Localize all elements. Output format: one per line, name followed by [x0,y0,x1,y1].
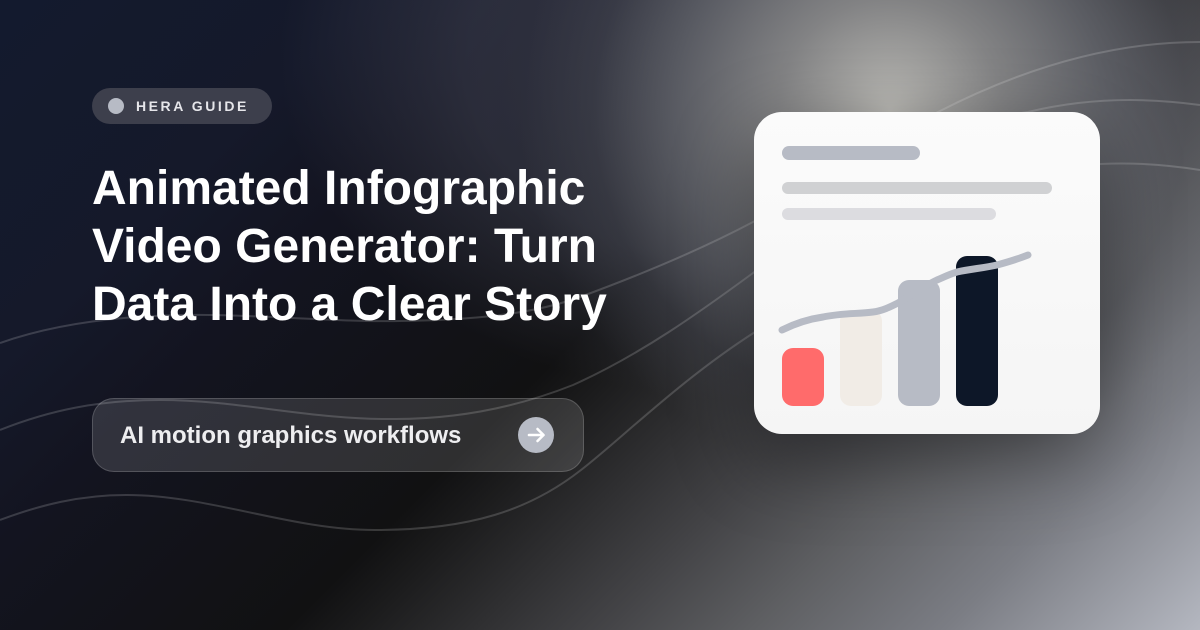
bar chart with trend line [778,252,1032,406]
title: Animated Infographic [92,162,585,215]
badge dot [108,98,124,114]
badge: HERA GUIDE [92,88,272,124]
placeholder text line 1 [782,182,1052,194]
panel: chart card [754,112,1100,434]
pill label: AI motion graphics workflows [120,422,461,449]
title: Video Generator: Turn [92,220,597,273]
call to action pill [92,398,584,472]
placeholder heading line [782,146,920,160]
title: Data Into a Clear Story [92,278,607,331]
icon: arrow in circle [518,417,554,453]
placeholder text line 2 [782,208,996,220]
badge label: HERA GUIDE [136,98,249,114]
title [92,162,607,331]
